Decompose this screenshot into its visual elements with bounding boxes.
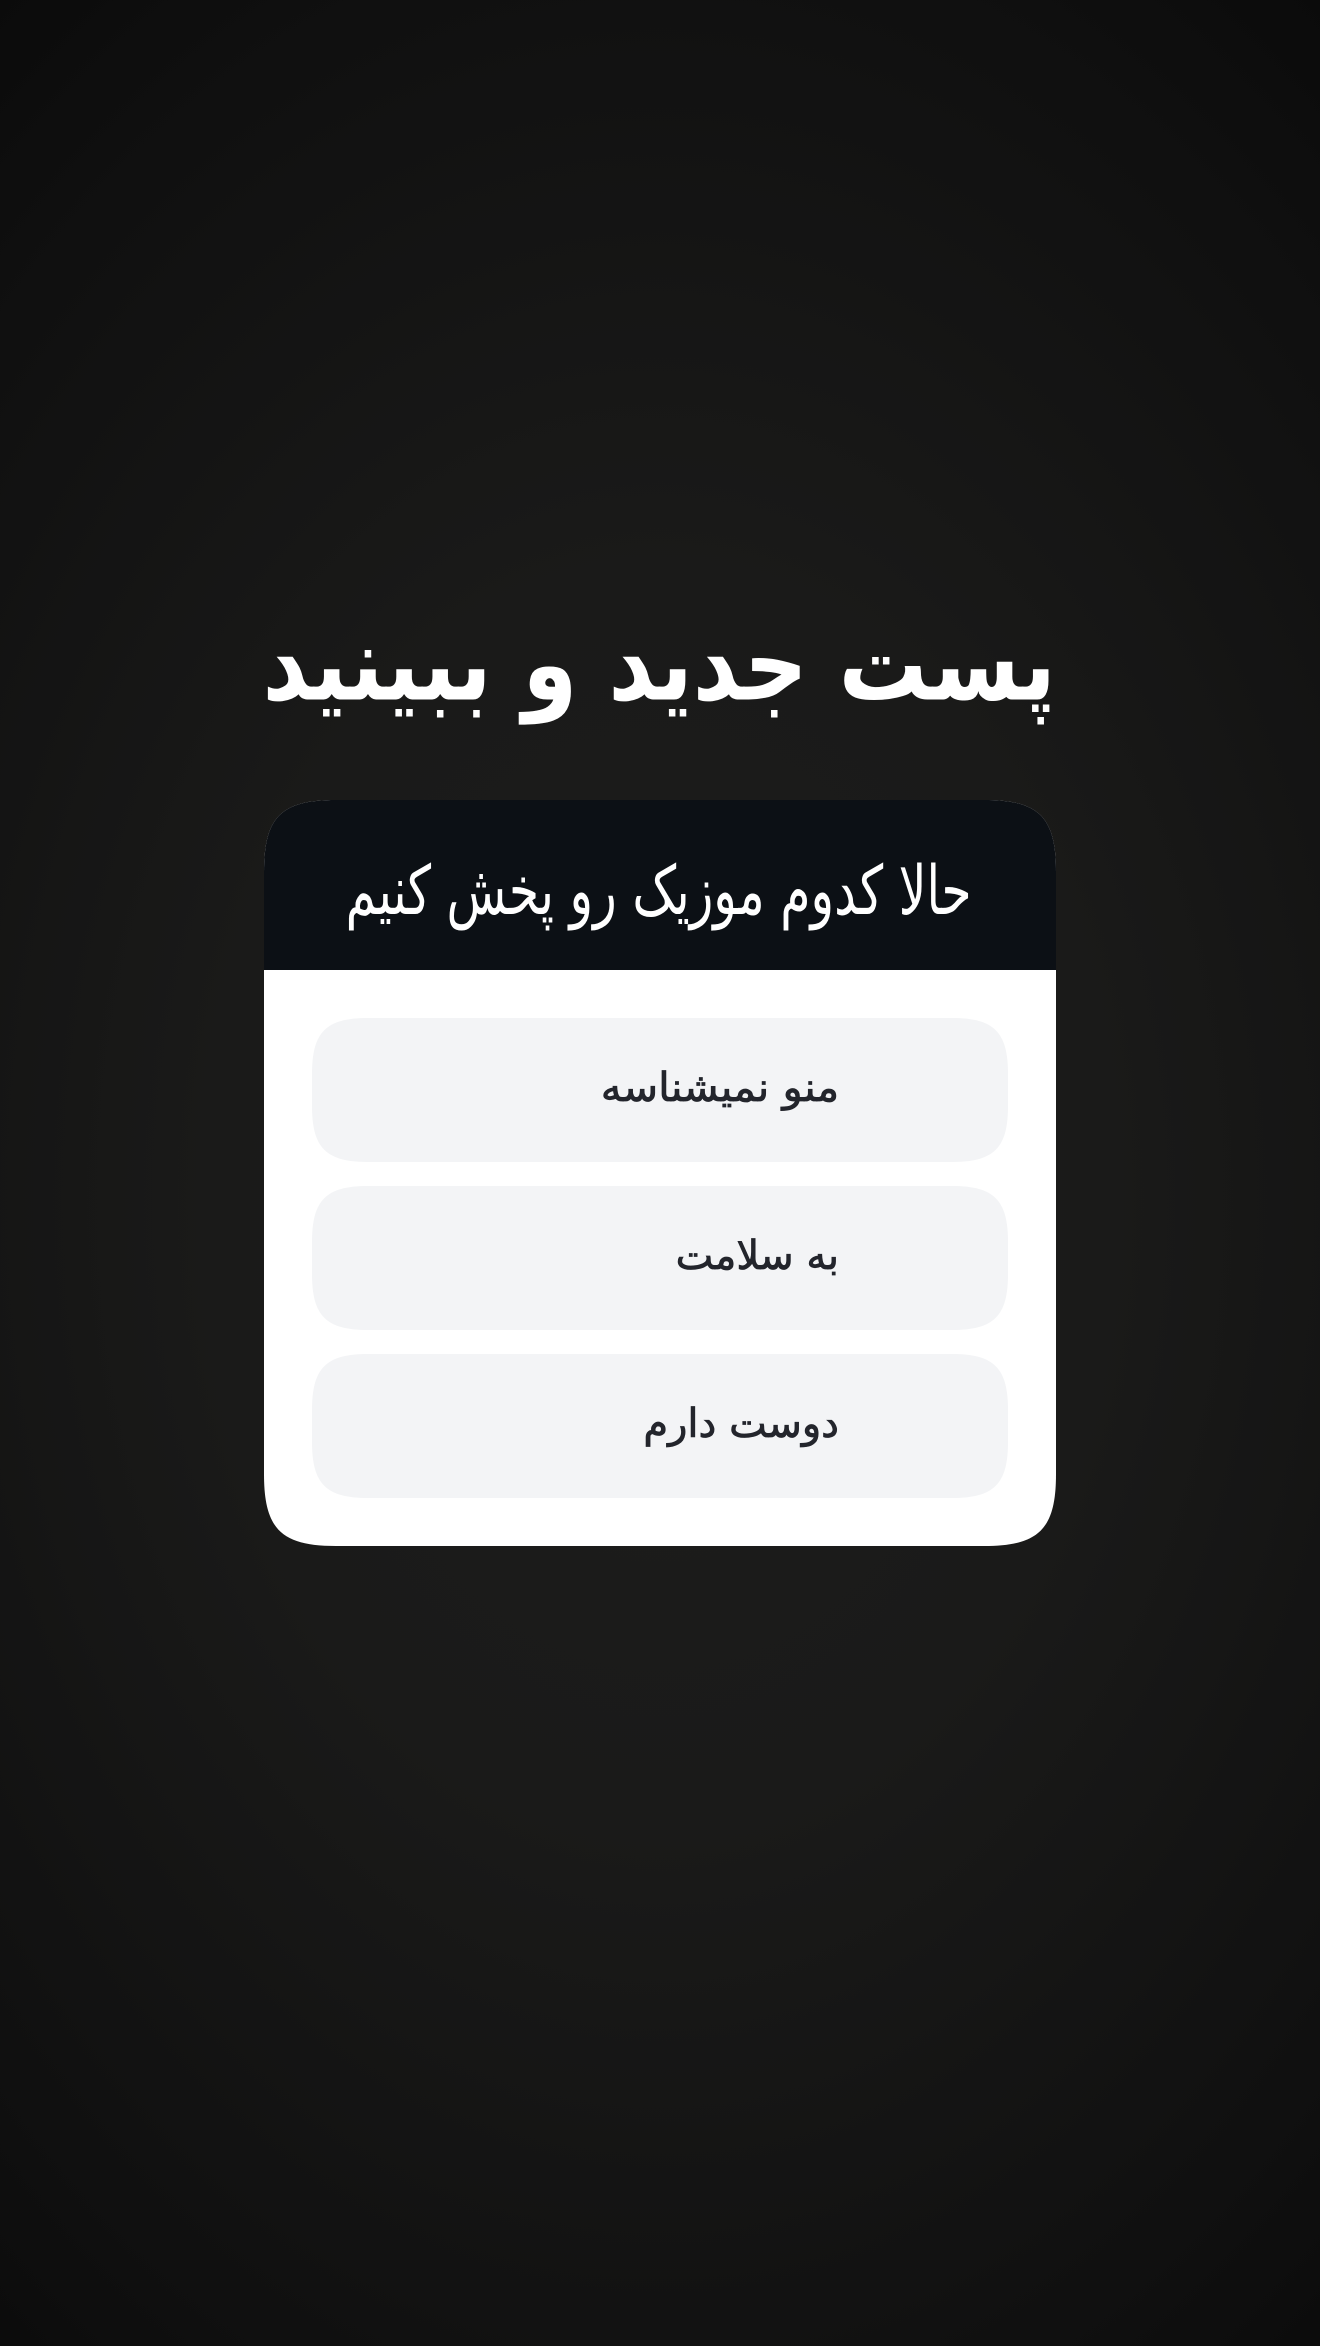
option: third answer: دوست دارم <box>643 1401 839 1447</box>
card header: حالا کدوم موزیک رو پخش کنیم <box>346 852 972 931</box>
option: second answer <box>312 1186 1008 1330</box>
title: پست جدید و ببینید <box>263 605 1056 724</box>
option: second answer: به سلامت <box>676 1233 839 1279</box>
option: third answer <box>312 1354 1008 1498</box>
card header <box>264 800 1056 970</box>
option: first answer <box>312 1018 1008 1162</box>
option: first answer: منو نمیشناسه <box>601 1065 839 1111</box>
panel: poll card <box>264 800 1056 1546</box>
